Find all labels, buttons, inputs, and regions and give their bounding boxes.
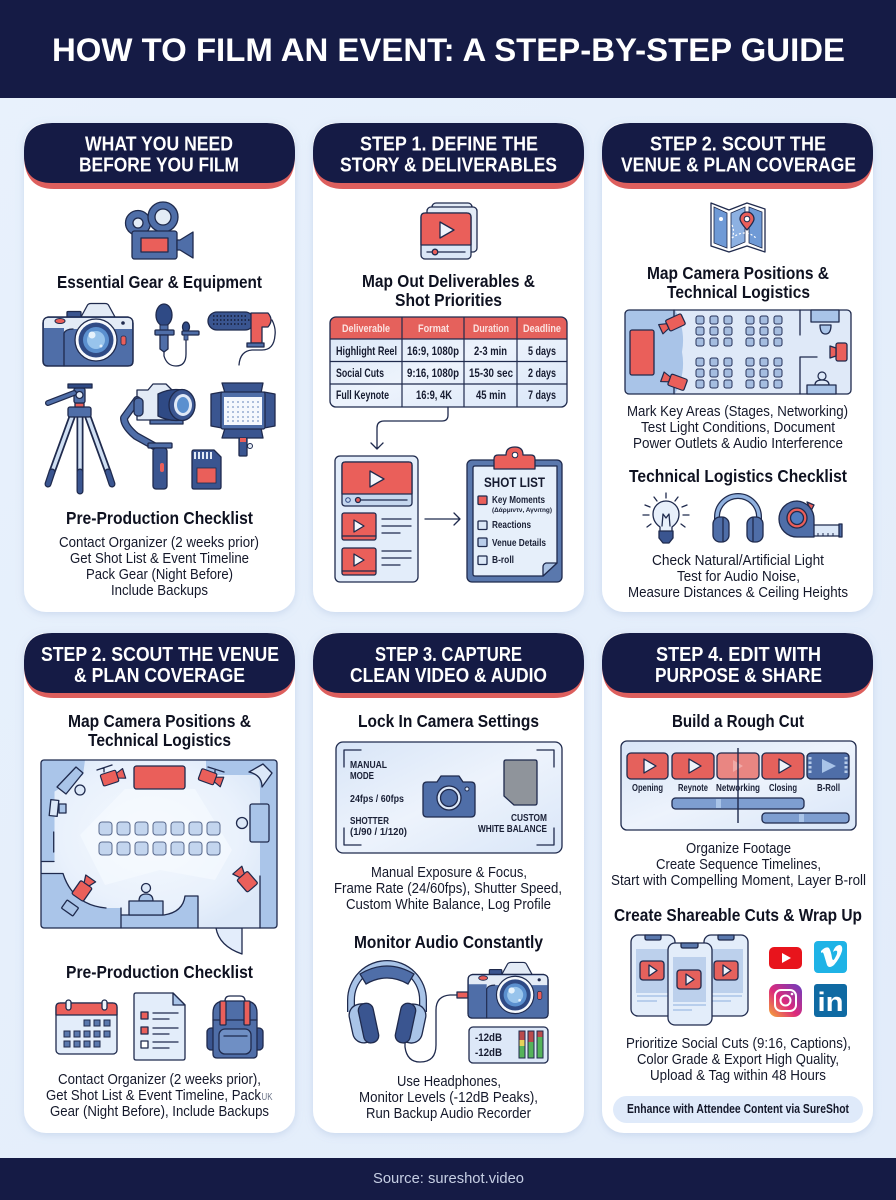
- checklist text: Include Backups: [111, 583, 208, 599]
- text: check light and audio: Test for Audio Noise,: [677, 569, 800, 585]
- footer source: [0, 1158, 896, 1200]
- shot list clipboard: (Δάρμιντν, Αγνιτng): [492, 507, 552, 514]
- deliverables table: 16:9, 1080p: [407, 344, 459, 358]
- checklist text: [59, 535, 259, 599]
- sub-heading: essential gear: Essential Gear & Equipment: [57, 272, 262, 292]
- callout: attendee content: Enhance with Attendee Content via SureShot: [627, 1102, 850, 1116]
- icon: Instagram: [769, 984, 802, 1017]
- text: organize footage: Organize Footage: [686, 841, 791, 857]
- icon: headphones with cable: [347, 964, 468, 1062]
- audio level meter: [469, 1027, 548, 1063]
- camera settings panel: (1/90 / 1/120): [350, 827, 407, 838]
- icon: YouTube: [769, 947, 802, 969]
- deliverables table: Social Cuts: [336, 366, 384, 380]
- sub-heading: map camera positions: Technical Logistics: [88, 730, 231, 750]
- panel heading: [313, 123, 584, 189]
- panel heading: STORY & DELIVERABLES: [340, 154, 557, 176]
- text: mark key areas: [627, 404, 848, 452]
- panel heading: STEP 4. EDIT WITH: [656, 643, 821, 666]
- panel heading: [602, 633, 873, 698]
- panel heading: WHAT YOU NEED: [85, 132, 233, 156]
- camera settings panel: 24fps / 60fps: [350, 794, 404, 805]
- icon: checklist document: [134, 993, 185, 1060]
- icon: LinkedIn: [814, 984, 847, 1017]
- text: use headphones: Monitor Levels (-12dB Peaks),: [359, 1090, 538, 1106]
- deliverables table: 45 min: [476, 388, 506, 402]
- icon: map with pin: [711, 203, 765, 252]
- floor plan: seating and cameras: [625, 310, 851, 394]
- text: prioritize social cuts: Upload & Tag within 48 Hours: [650, 1068, 826, 1084]
- text: organize footage: Create Sequence Timelines,: [656, 857, 821, 873]
- checklist text: [46, 1072, 273, 1120]
- text: organize footage: Start with Compelling Moment, Layer B-roll: [611, 873, 866, 889]
- icon: video stack: [421, 203, 477, 259]
- checklist text: Get Shot List & Event Timeline: [70, 551, 249, 567]
- sub-heading: map out deliverables: Shot Priorities: [395, 290, 502, 310]
- video storyboard: [335, 456, 418, 582]
- deliverables table: 9:16, 1080p: [407, 366, 459, 380]
- deliverables table: 16:9, 4K: [416, 388, 452, 402]
- text: mark key areas: Mark Key Areas (Stages, Networking): [627, 404, 848, 420]
- panel heading: STEP 2. SCOUT THE: [650, 132, 826, 156]
- text: manual exposure: Frame Rate (24/60fps), Shutter Speed,: [334, 881, 562, 897]
- shot list clipboard: SHOT LIST: [484, 474, 545, 490]
- panel: step 2 scout the venue (row two): [24, 633, 295, 1133]
- deliverables table: 2 days: [528, 366, 556, 380]
- icon: calendar: [56, 1000, 117, 1054]
- text: use headphones: Run Backup Audio Recorder: [366, 1106, 531, 1122]
- camera settings panel: MODE: [350, 771, 374, 782]
- icon: Vimeo: [814, 941, 847, 973]
- camera settings panel: SHOTTER: [350, 816, 390, 827]
- icon: camera: [468, 962, 548, 1018]
- sub-heading: build a rough cut: Build a Rough Cut: [672, 711, 804, 731]
- checklist text: UK: [262, 1092, 273, 1103]
- checklist text: Gear (Night Before), Include Backups: [50, 1104, 269, 1120]
- camera settings panel: [336, 742, 562, 853]
- icon: DSLR camera: [43, 304, 133, 366]
- text: check light and audio: Measure Distances & Ceiling Heights: [628, 585, 848, 601]
- icon: microphones: [155, 304, 199, 366]
- sub-heading: pre-production checklist: Pre-Production Checklist: [66, 962, 253, 982]
- text: prioritize social cuts: Prioritize Social Cuts (9:16, Captions),: [626, 1036, 851, 1052]
- icon: backpack: [207, 996, 263, 1058]
- panel heading: [313, 633, 584, 698]
- floor plan: venue coverage: [41, 760, 277, 954]
- sub-heading: map camera positions: [68, 711, 251, 750]
- panel: step 3 capture clean video and audio: [313, 633, 584, 1133]
- icon: LED light panel: [211, 383, 275, 456]
- panel heading: STEP 1. DEFINE THE: [360, 132, 538, 156]
- text: mark key areas: Power Outlets & Audio Interference: [633, 436, 843, 452]
- deliverables table: Format: [418, 323, 449, 335]
- deliverables table: Deadline: [523, 323, 561, 335]
- sub-heading: map out deliverables: Map Out Deliverables &: [362, 271, 535, 291]
- text: check light and audio: Check Natural/Artificial Light: [652, 553, 824, 569]
- icon: tape measure: [779, 501, 842, 537]
- checklist text: Contact Organizer (2 weeks prior): [59, 535, 259, 551]
- shot list clipboard: Reactions: [492, 520, 531, 531]
- text: prioritize social cuts: Color Grade & Export High Quality,: [637, 1052, 839, 1068]
- panel heading: PURPOSE & SHARE: [655, 664, 822, 687]
- text: manual exposure: Custom White Balance, Log Profile: [346, 897, 551, 913]
- sub-heading: map camera positions: Map Camera Positions &: [68, 711, 251, 731]
- timeline panel: Reynote: [678, 783, 708, 794]
- text: mark key areas: Test Light Conditions, Document: [641, 420, 835, 436]
- sub-heading: pre-production checklist: Pre-Production Checklist: [66, 508, 253, 528]
- shot list clipboard: Key Moments: [492, 495, 545, 506]
- panel heading: [24, 633, 295, 698]
- text: prioritize social cuts: [626, 1036, 851, 1084]
- shot list clipboard: [467, 447, 562, 582]
- camera settings panel: MANUAL: [350, 760, 387, 771]
- deliverables table: 7 days: [528, 388, 556, 402]
- icon: shotgun mic: [208, 312, 275, 365]
- timeline panel: Closing: [769, 783, 797, 794]
- callout: attendee content: [613, 1096, 863, 1123]
- text: use headphones: Use Headphones,: [397, 1074, 501, 1090]
- timeline panel: Opening: [632, 783, 663, 794]
- sub-heading: map camera positions: Map Camera Positions &: [647, 263, 829, 283]
- deliverables table: Duration: [473, 323, 509, 335]
- camera settings panel: CUSTOM: [511, 813, 547, 824]
- deliverables table: Full Keynote: [336, 388, 389, 402]
- text: use headphones: [359, 1074, 538, 1122]
- panel: step 2 scout the venue: [602, 123, 873, 612]
- icon: camera gimbal: [124, 384, 195, 489]
- sub-heading: map camera positions: [647, 263, 829, 302]
- shot list clipboard: Venue Details: [492, 538, 546, 549]
- deliverables table: 15-30 sec: [469, 366, 513, 380]
- timeline panel: Networking: [716, 783, 760, 794]
- sub-heading: map out deliverables: [362, 271, 535, 310]
- deliverables table: 2-3 min: [474, 344, 507, 358]
- icon: phones with vertical video: [631, 935, 748, 1025]
- camera settings panel: WHITE BALANCE: [478, 824, 547, 835]
- panel heading: STEP 2. SCOUT THE VENUE: [41, 643, 279, 666]
- checklist text: Pack Gear (Night Before): [86, 567, 233, 583]
- arrow: table to storyboard: [371, 407, 448, 449]
- icon: movie camera: [126, 202, 193, 259]
- checklist text: Get Shot List & Event Timeline, Pack: [46, 1088, 262, 1104]
- panel heading: [602, 123, 873, 189]
- sub-heading: monitor audio: Monitor Audio Constantly: [354, 932, 543, 952]
- title banner: [0, 0, 896, 98]
- text: manual exposure: [334, 865, 562, 913]
- sub-heading: map camera positions: Technical Logistics: [667, 282, 810, 302]
- panel: what you need before you film: [24, 123, 295, 612]
- deliverables table: Deliverable: [342, 323, 390, 335]
- panel heading: BEFORE YOU FILM: [79, 154, 239, 176]
- audio level meter: -12dB: [475, 1047, 502, 1059]
- icon: LinkedIn: in: [818, 987, 844, 1017]
- icon: light bulb: [643, 493, 689, 543]
- icon: tripod: [48, 384, 112, 491]
- panel heading: CLEAN VIDEO & AUDIO: [350, 664, 547, 687]
- panel heading: [24, 123, 295, 189]
- deliverables table: 5 days: [528, 344, 556, 358]
- footer source: Source: sureshot.video: [373, 1171, 524, 1187]
- deliverables table: Highlight Reel: [336, 344, 397, 358]
- panel: step 4 edit with purpose: [602, 633, 873, 1133]
- sub-heading: lock in camera settings: Lock In Camera Settings: [358, 711, 539, 731]
- arrow: storyboard to shot list: [425, 513, 460, 525]
- text: manual exposure: Manual Exposure & Focus,: [371, 865, 527, 881]
- panel: step 1 define the story: [313, 123, 584, 612]
- title banner: HOW TO FILM AN EVENT: A STEP-BY-STEP GUIDE: [52, 32, 845, 68]
- timeline panel: [621, 741, 856, 830]
- sub-heading: technical logistics checklist: Technical Logistics Checklist: [629, 466, 847, 486]
- panel heading: VENUE & PLAN COVERAGE: [621, 154, 856, 176]
- text: check light and audio: [628, 553, 848, 601]
- timeline panel: B-Roll: [817, 783, 840, 794]
- panel heading: STEP 3. CAPTURE: [375, 643, 522, 666]
- panel heading: & PLAN COVERAGE: [74, 664, 245, 687]
- shot list clipboard: B-roll: [492, 555, 514, 566]
- audio level meter: -12dB: [475, 1032, 502, 1044]
- sub-heading: create shareable cuts: Create Shareable Cuts & Wrap Up: [614, 905, 862, 925]
- checklist text: Contact Organizer (2 weeks prior),: [58, 1072, 261, 1088]
- deliverables table: [330, 317, 567, 407]
- icon: headphones: [713, 496, 763, 542]
- icon: SD card: [192, 450, 221, 489]
- text: organize footage: [611, 841, 866, 889]
